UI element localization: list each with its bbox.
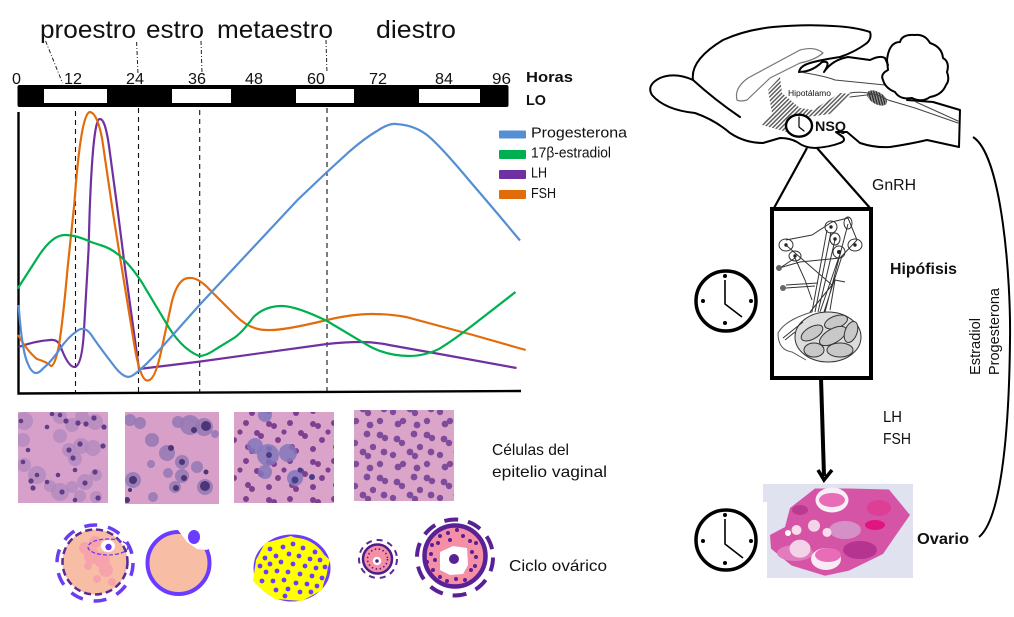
label: diestro: diestro	[376, 16, 456, 44]
cerebellum	[882, 35, 948, 100]
label: LO: LO	[526, 92, 546, 109]
stage leader lines	[46, 40, 327, 83]
label: LH FSH: FSH	[883, 431, 911, 448]
label: metaestro: metaestro	[217, 16, 333, 44]
follicle: antral	[417, 520, 493, 596]
hour axis numbers: 84	[435, 71, 453, 88]
brain outline	[650, 75, 960, 148]
label: Estradiol Progesterona: Estradiol	[968, 318, 984, 375]
panel: hipofisis	[772, 209, 871, 378]
label: celulas del epitelio vaginal: Células del	[492, 442, 569, 459]
label: LH FSH	[883, 409, 911, 448]
hour axis numbers: 12	[64, 71, 82, 88]
follicle: ovulating	[148, 526, 216, 594]
hour axis numbers	[12, 71, 511, 88]
stage labels	[40, 16, 456, 44]
chart axes	[18, 112, 521, 394]
legend: estradiol: 17β-estradiol	[531, 146, 611, 162]
legend: progesterona: Progesterona	[531, 126, 628, 142]
hour axis numbers: 60	[307, 71, 325, 88]
smear photo 3: metaestro	[234, 408, 334, 503]
legend	[499, 126, 628, 202]
icon: clock ovary	[696, 510, 756, 570]
light dark bar	[18, 85, 508, 107]
smear photo 1: proestro	[15, 410, 108, 503]
label: Ovario: Ovario	[917, 531, 969, 548]
label: celulas del epitelio vaginal	[492, 442, 607, 481]
hypothalamic hatch region	[762, 77, 852, 132]
hour axis numbers: 0	[12, 71, 21, 88]
follicle: preovulatory	[57, 525, 133, 601]
legend: FSH: FSH	[531, 186, 556, 202]
ovary photo	[763, 484, 913, 578]
dark hatch nucleus	[864, 87, 890, 109]
cortex outline	[693, 25, 888, 80]
label: ciclo ovarico: Ciclo ovárico	[509, 558, 607, 575]
brain diagram	[650, 25, 960, 148]
label: Horas: Horas	[526, 69, 573, 86]
chart: hormone curves	[18, 108, 526, 394]
pituitary drawing	[778, 217, 862, 362]
arrow: feedback arc	[973, 137, 1010, 537]
label: Estradiol Progesterona: Progesterona	[987, 287, 1003, 375]
corpus luteum	[253, 536, 330, 601]
small clock in NSQ	[786, 115, 812, 137]
hour axis numbers: 24	[126, 71, 144, 88]
curve: FSH	[18, 112, 526, 381]
label: celulas del epitelio vaginal: epitelio vaginal	[492, 464, 607, 481]
label: GnRH: GnRH	[872, 177, 916, 194]
label: estro: estro	[146, 16, 204, 44]
stage dashed lines	[76, 108, 327, 393]
hour axis numbers: 96	[492, 71, 511, 88]
funnel lines to pituitary box	[774, 148, 870, 208]
label: proestro: proestro	[40, 16, 136, 44]
icon: clock pituitary	[696, 271, 756, 331]
label: NSQ: NSQ	[815, 118, 846, 134]
curve: 17-beta estradiol	[18, 235, 515, 356]
midbrain line	[800, 72, 885, 85]
curve: progesterona	[19, 124, 520, 377]
smear photo 2: estro	[124, 412, 219, 504]
label: LH FSH: LH	[883, 409, 902, 426]
curve: LH	[19, 119, 516, 369]
hour axis numbers: 72	[369, 71, 387, 88]
hippocampus outline	[736, 49, 823, 101]
label: Estradiol Progesterona	[968, 287, 1003, 375]
label: hipotalamo: Hipotálamo	[788, 89, 832, 98]
smear photo 4: diestro	[354, 410, 454, 501]
hour axis numbers: 36	[188, 71, 206, 88]
follicle: small	[359, 540, 397, 578]
arrow: pituitary to ovary	[818, 378, 832, 480]
brainstem tract lines	[850, 92, 958, 123]
label: Hipofisis: Hipófisis	[890, 261, 957, 278]
legend: LH: LH	[531, 166, 547, 182]
hour axis numbers: 48	[245, 71, 263, 88]
